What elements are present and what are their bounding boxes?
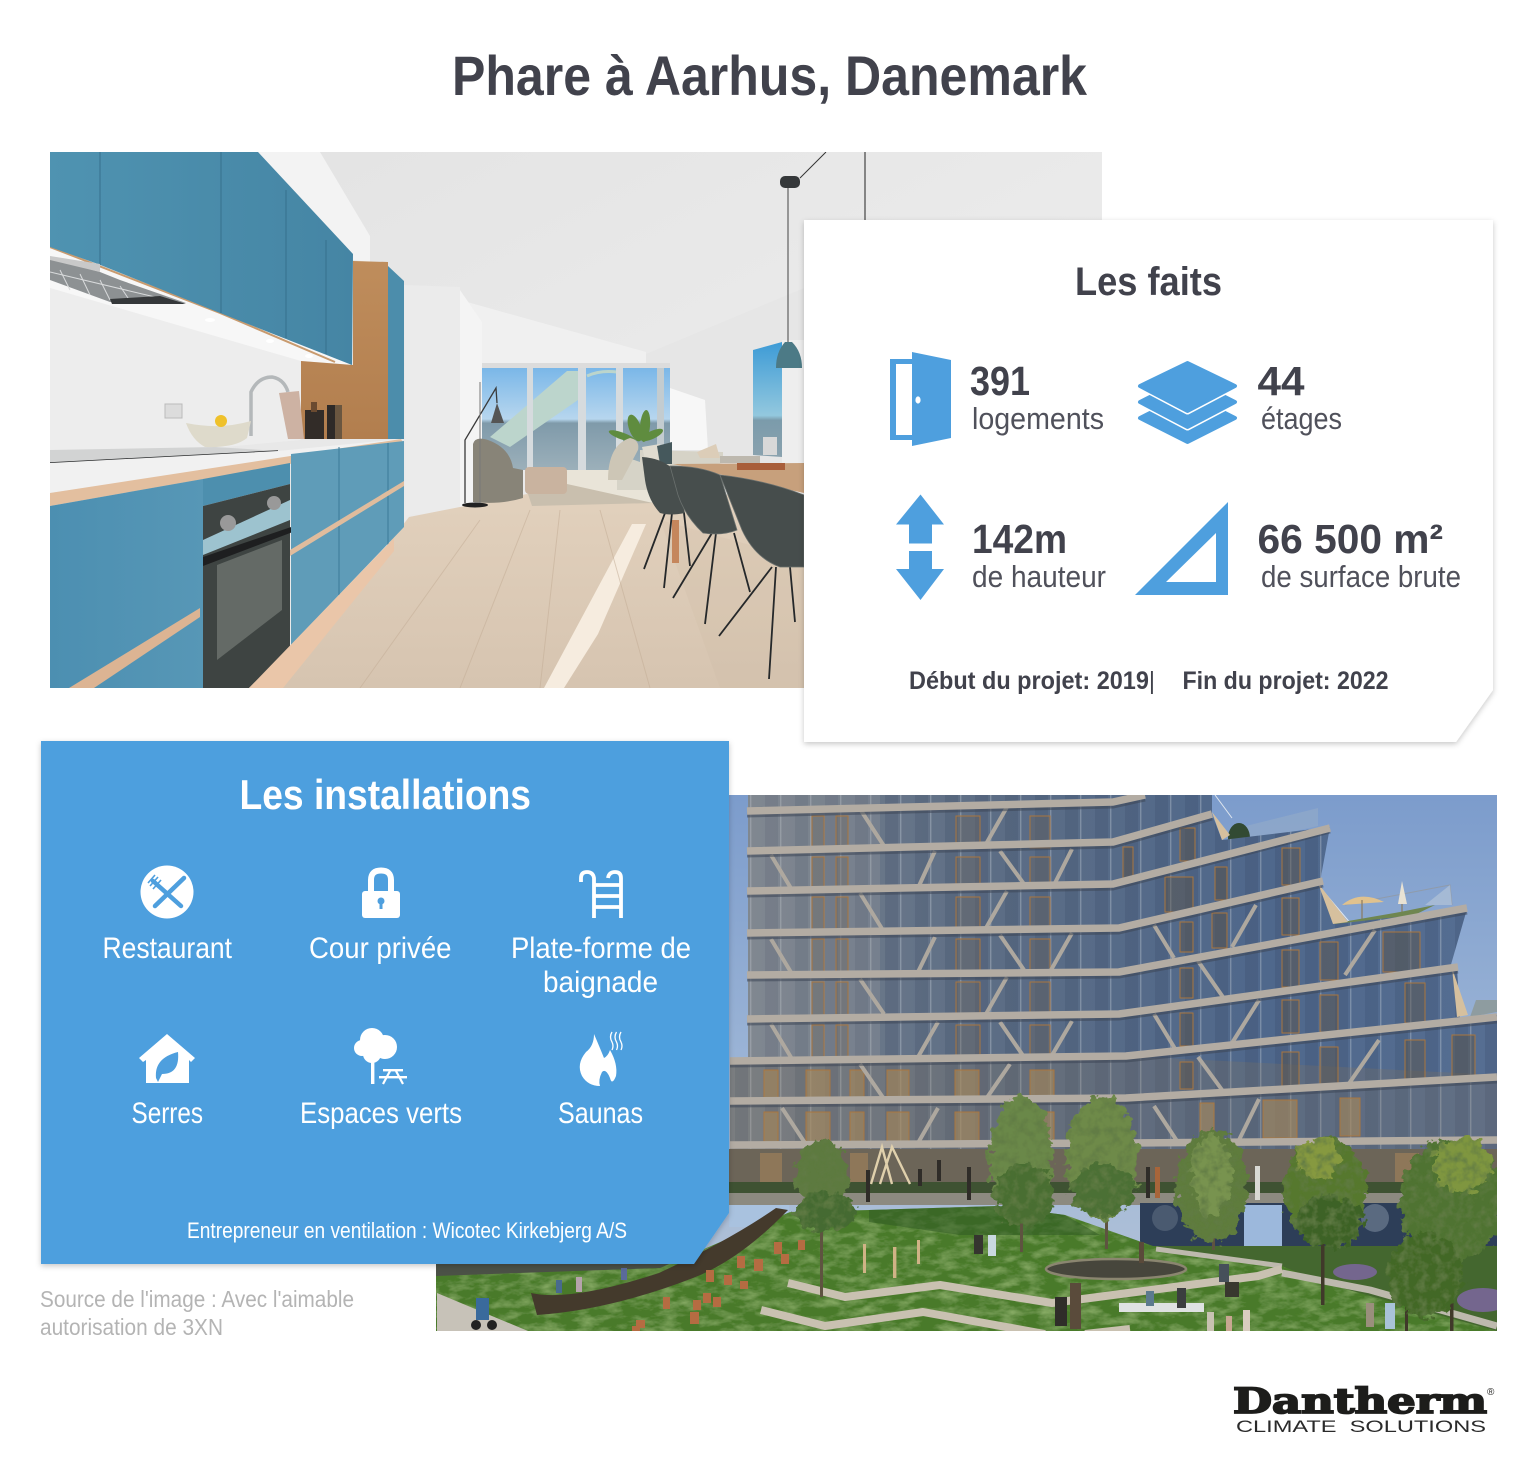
ceiling soffit bbox=[258, 152, 370, 262]
tree stumps bbox=[632, 1240, 805, 1331]
stat: 66 500 m² de surface brute: de surface brute bbox=[1261, 559, 1461, 594]
lavender bbox=[1333, 1264, 1509, 1312]
floor bbox=[278, 490, 804, 688]
armchair bbox=[473, 439, 523, 503]
rug bbox=[528, 484, 653, 506]
stat: 44 étages: 44 bbox=[1258, 358, 1305, 404]
label: Saunas: Saunas bbox=[558, 1097, 643, 1130]
pond and waterfall bbox=[729, 1203, 1497, 1253]
logo: Dantherm Climate Solutions: CLIMATE SOLUTIONS bbox=[1236, 1417, 1486, 1436]
label: Serres: Serres bbox=[132, 1097, 203, 1130]
play frame bbox=[871, 1147, 910, 1184]
plant bbox=[608, 410, 663, 442]
concrete bench paths bbox=[761, 1269, 1282, 1334]
upper cabinets bbox=[50, 152, 353, 365]
hob bbox=[50, 447, 278, 463]
tall wood cabinet bbox=[301, 261, 388, 439]
panel: Les installations bbox=[41, 741, 729, 1264]
wooden boat bbox=[531, 1208, 788, 1315]
lower cabinets left bbox=[50, 479, 203, 688]
concrete steps bbox=[1156, 1249, 1497, 1326]
image source credit: autorisation de 3XN bbox=[40, 1314, 223, 1340]
icon: set square bbox=[1135, 502, 1228, 595]
stat: 142m de hauteur bbox=[972, 516, 1106, 594]
tree: left bbox=[796, 1140, 856, 1297]
building facade bbox=[730, 795, 1497, 1175]
label: Plate-forme de baignade: baignade bbox=[543, 966, 658, 999]
pouf bbox=[525, 467, 567, 494]
ventilation contractor note: Entrepreneur en ventilation : Wicotec Kirkebjerg A/S bbox=[187, 1218, 627, 1243]
stat: 44 étages bbox=[1258, 358, 1342, 436]
diagonal facade braces bbox=[771, 807, 1379, 1143]
image source credit: Source de l'image : Avec l'aimable bbox=[40, 1286, 354, 1312]
ground floor bbox=[729, 1149, 1497, 1205]
icon: stacked layers bbox=[1140, 363, 1235, 442]
rooftop terrace bbox=[1215, 795, 1497, 1017]
plinth bbox=[249, 538, 394, 688]
heading: Les installations: Les installations bbox=[240, 771, 531, 818]
tree: right 1 bbox=[1283, 1138, 1367, 1305]
icon: tree and picnic table bbox=[354, 1028, 407, 1084]
worktop bbox=[50, 439, 401, 493]
under-cabinet light strip bbox=[50, 247, 353, 365]
blue panel background bbox=[41, 741, 729, 1264]
image source credit bbox=[40, 1286, 354, 1340]
pillar bbox=[404, 285, 460, 515]
oven bbox=[203, 484, 298, 688]
garden beds under pond edge bbox=[1140, 1246, 1497, 1331]
icon: greenhouse bbox=[139, 1034, 195, 1083]
trampoline bbox=[1046, 1259, 1186, 1279]
logo: Dantherm Climate Solutions: ® bbox=[1487, 1387, 1495, 1398]
back wall above windows bbox=[470, 303, 548, 358]
terrace people bbox=[866, 1160, 1260, 1202]
floor lamp bbox=[462, 382, 504, 508]
project start date: Début du projet: 2019| bbox=[909, 667, 1155, 695]
beige structural struts bbox=[1212, 812, 1468, 1017]
card background bbox=[804, 220, 1493, 742]
stat: 44 étages: étages bbox=[1261, 401, 1342, 436]
label: Cour privée: Cour privée bbox=[309, 932, 452, 965]
right side window bbox=[753, 342, 782, 457]
sun streak on floor bbox=[544, 524, 646, 688]
oven drawer bbox=[203, 463, 290, 506]
tree: right 2 bbox=[1387, 1137, 1504, 1331]
spotlights bbox=[205, 318, 313, 358]
floor slabs bbox=[730, 799, 1497, 1105]
icon: padlock bbox=[362, 870, 400, 918]
switch bbox=[165, 404, 182, 418]
dining chairs bbox=[642, 457, 804, 679]
cooker hood bbox=[50, 256, 186, 304]
lower cabinets right bbox=[291, 441, 404, 645]
icon: pool ladder bbox=[581, 872, 621, 918]
willow bbox=[1176, 1131, 1248, 1250]
garden posts bbox=[863, 1240, 920, 1278]
icon: height arrows bbox=[896, 494, 944, 600]
lawn bbox=[436, 1206, 1497, 1331]
stat: 66 500 m² de surface brute: 66 500 m² bbox=[1258, 516, 1443, 562]
project end date: Fin du projet: 2022 bbox=[1182, 667, 1388, 695]
title: Phare à Aarhus, Danemark bbox=[452, 44, 1088, 107]
icon: sauna flame bbox=[580, 1032, 622, 1086]
label: Restaurant: Restaurant bbox=[102, 932, 233, 965]
book and bottles bbox=[279, 391, 342, 439]
logo: Dantherm Climate Solutions: Dantherm bbox=[1233, 1381, 1487, 1422]
photo: Phare building and garden bbox=[436, 795, 1509, 1334]
footpath bbox=[437, 1293, 528, 1331]
icon: restaurant bbox=[140, 866, 194, 918]
dining table bbox=[672, 437, 804, 563]
stat: 391 logements: logements bbox=[972, 401, 1104, 436]
pendant lamp bbox=[776, 152, 865, 368]
label: Plate-forme de baignade: Plate-forme de bbox=[511, 932, 691, 965]
panorama windows bbox=[480, 363, 670, 470]
label: Plate-forme de baignade bbox=[511, 932, 691, 999]
faucet bbox=[251, 377, 288, 436]
tree: centre 1 bbox=[989, 1096, 1054, 1252]
stat: 66 500 m² de surface brute bbox=[1258, 516, 1461, 594]
stat: 142m de hauteur: de hauteur bbox=[972, 559, 1106, 594]
stat: 391 logements bbox=[970, 358, 1104, 436]
backsplash bbox=[50, 288, 144, 364]
picnicking people bbox=[471, 1235, 1395, 1331]
right wall bbox=[646, 288, 804, 470]
timber framed windows bbox=[764, 816, 1475, 1142]
panel: Les faits bbox=[804, 220, 1493, 742]
tree: centre 2 bbox=[1066, 1096, 1138, 1249]
icon: door bbox=[890, 352, 951, 446]
stat: 391 logements: 391 bbox=[970, 358, 1030, 404]
logo: Dantherm Climate Solutions bbox=[1233, 1381, 1495, 1436]
sofa bbox=[608, 438, 723, 490]
photo: apartment kitchen interior bbox=[50, 152, 1102, 688]
heading: Les faits: Les faits bbox=[1075, 260, 1222, 304]
fruit bowl bbox=[186, 415, 251, 447]
stat: 142m de hauteur: 142m bbox=[972, 516, 1067, 562]
label: Espaces verts: Espaces verts bbox=[300, 1097, 462, 1130]
